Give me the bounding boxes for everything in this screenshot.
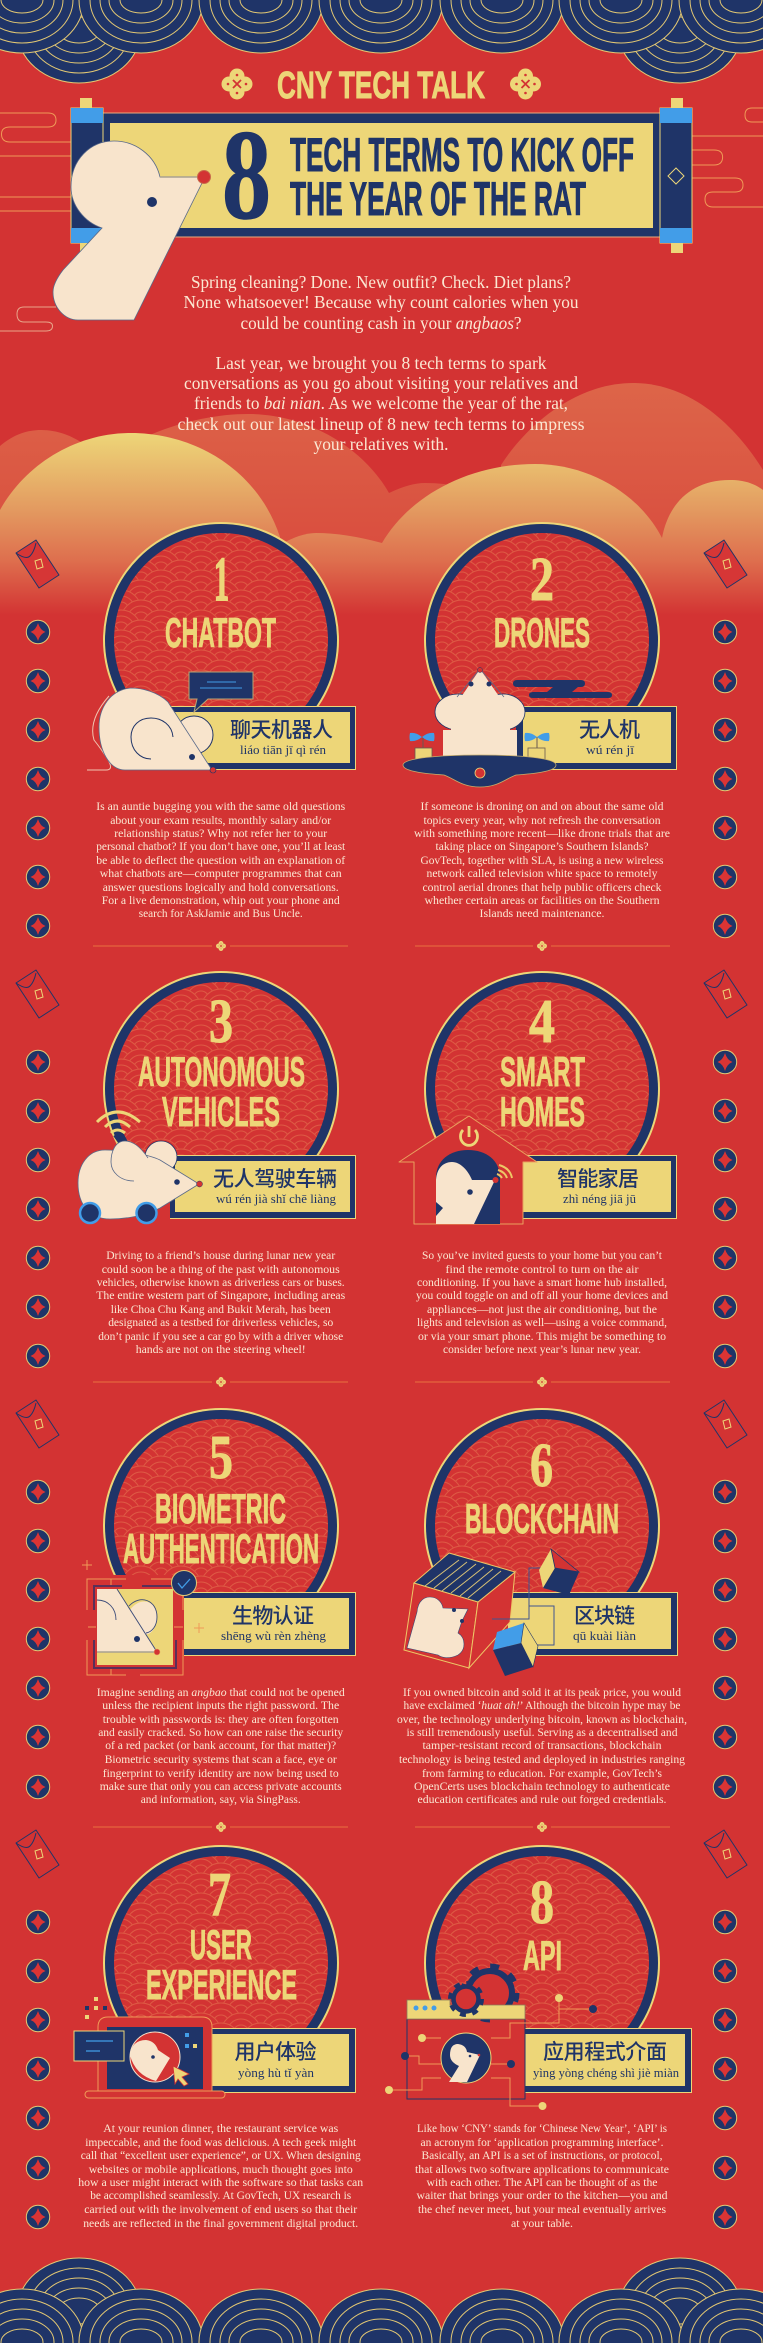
body text: Like how ‘CNY’ stands for ‘Chinese New Year’, ‘API’ is [417, 2121, 667, 2135]
banner: 聊天机器人 [230, 719, 333, 742]
large gear [463, 1966, 517, 2020]
number: 6 [530, 1432, 553, 1500]
panel 1: chatbot: 1 [214, 546, 229, 614]
kicker text: CNY TECH TALK [277, 65, 485, 107]
intro text: conversations as you go about visiting your relatives and [184, 373, 578, 393]
medallion [103, 971, 339, 1207]
body text [96, 799, 346, 920]
scroll knobs [80, 98, 683, 253]
panel 1: chatbot [87, 522, 356, 920]
banner: liáo tiān jī qì rén [240, 742, 327, 757]
body text: If you owned bitcoin and sold it at its peak price, you would [403, 1685, 681, 1699]
body text: taking place on Singapore’s Southern Islands? [436, 839, 648, 853]
back clouds [0, 383, 763, 560]
body text: tamper-resistant record of transactions, blockchain [422, 1738, 662, 1752]
banner: qū kuài liàn [573, 1628, 636, 1643]
banner: wú rén jià shǐ chē liàng [216, 1191, 336, 1206]
body text: call that “excellent user experience”, or UX. When designing [81, 2148, 361, 2162]
illustration: biometric phone [82, 1560, 204, 1679]
body text [397, 1685, 687, 1806]
body text: OpenCerts uses blockchain technology to authenticate [414, 1779, 670, 1793]
body text: at your table. [511, 2216, 573, 2230]
medallion [424, 1408, 660, 1644]
banner: yòng hù tǐ yàn [238, 2065, 315, 2080]
panel 2: drones [403, 522, 677, 920]
illustration: header rat [53, 141, 210, 320]
body text: consider before next year’s lunar new year. [443, 1342, 641, 1356]
body text [414, 799, 670, 920]
body text [96, 1248, 346, 1356]
body text: For a live demonstration, whip out your phone and [102, 893, 340, 907]
body text: impeccable, and the food was delicious. A tech geek might [85, 2135, 357, 2149]
body text: what chatbots are—computer programmes that can [100, 866, 342, 880]
body text: carried out with the involvement of end users so that their [84, 2202, 357, 2216]
heading [500, 1048, 585, 1135]
body text: about your exam results, monthly salary and/or [110, 813, 331, 827]
body text: or via your smart phone. This might be something to [418, 1329, 666, 1343]
cursor [173, 2066, 189, 2086]
body text: Driving to a friend’s house during lunar new year [106, 1248, 335, 1262]
body text: find the remote control to turn on the air [446, 1262, 638, 1276]
heading: CHATBOT [165, 609, 276, 656]
navy shadow [94, 1586, 176, 1668]
banner: 智能家居 [557, 1168, 639, 1191]
body text: technology is being tested and deployed in industries ranging [399, 1752, 685, 1766]
pixel dots [85, 1997, 197, 2048]
banner: 无人机 [579, 719, 640, 742]
illustration: smart home [399, 1116, 537, 1224]
body text: control aerial drones that help public officers check [422, 880, 662, 894]
panel 3: autonomous vehicles [78, 971, 356, 1356]
illustration: API window and gears [385, 1966, 597, 2110]
banner: 无人驾驶车辆 [213, 1168, 337, 1191]
body text: over, the technology underlying bitcoin, known as blockchain, [397, 1712, 687, 1726]
heading: BLOCKCHAIN [465, 1495, 619, 1542]
body text [97, 1685, 345, 1806]
medallion [103, 1408, 339, 1644]
intro text: Spring cleaning? Done. New outfit? Check. Diet plans? [191, 272, 571, 292]
number: 5 [209, 1424, 233, 1492]
banner: wú rén jī [586, 742, 634, 757]
panel 4: smart homes [399, 971, 677, 1356]
body text: of a red packet (or bank account, for that matter)? [105, 1738, 336, 1752]
banner [183, 1592, 356, 1656]
scroll banner [71, 98, 692, 253]
big numeral 8: 8 [222, 103, 271, 246]
body text: The entire western part of Singapore, including areas [96, 1288, 346, 1302]
body text: network called television white space to remotely [426, 866, 658, 880]
circuit lines [389, 1998, 593, 2106]
body text: vehicles, otherwise known as driverless cars or buses. [97, 1275, 345, 1289]
banner: yìng yòng chéng shì jiè miàn [533, 2065, 679, 2080]
body text: like Choa Chu Kang and Bukit Merah, has been [111, 1302, 331, 1316]
body text [78, 2121, 363, 2230]
body text [416, 1248, 668, 1356]
illustration: rat with speech bubble [87, 672, 253, 773]
number: 8 [530, 1869, 554, 1937]
body text: personal chatbot? If you don’t have one, you’ll at least [96, 839, 346, 853]
rat on cube [407, 1597, 468, 1658]
wifi arcs [497, 1165, 512, 1178]
medallion [103, 522, 339, 758]
body text: whether certain areas or facilities on the Southern [424, 893, 660, 907]
door with rat [436, 1150, 500, 1224]
kicker: CNY Tech Talk [222, 65, 541, 107]
banner: 用户体验 [234, 2041, 316, 2064]
decorative cloud lines [0, 108, 763, 331]
body text: make sure that only you can access private accounts [100, 1779, 342, 1793]
clouds [0, 383, 763, 620]
body text: Is an auntie bugging you with the same old questions [96, 799, 346, 813]
body text: Biometric security systems that scan a face, eye or [105, 1752, 337, 1766]
banner [170, 1155, 356, 1219]
body text: hands are not on the steering wheel! [136, 1342, 306, 1356]
body text: fingerprint to verify identity are now being used to [103, 1766, 339, 1780]
banner [205, 2028, 356, 2093]
body text: the chef never meet, but your meal eventually arrives [418, 2202, 666, 2216]
body text: from farming to education. For example, GovTech’s [422, 1766, 662, 1780]
banner: zhì néng jiā jū [563, 1191, 636, 1206]
banner: shēng wù rèn zhèng [221, 1628, 327, 1643]
body text: and information, say, via SingPass. [141, 1792, 301, 1806]
panel 5: biometric authentication [82, 1408, 356, 1806]
panel 6: blockchain [397, 1408, 687, 1806]
body text: with something more recent—like drone trials that are [414, 826, 670, 840]
illustration: drone rat [403, 668, 612, 787]
front clouds [0, 433, 763, 620]
body text: Imagine sending an angbao that could not be opened [97, 1685, 345, 1699]
illustration: laptop with rat [74, 1997, 225, 2098]
banner [520, 2028, 692, 2093]
heading: AUTONOMOUS [138, 1048, 305, 1095]
dividers row 1 [93, 941, 670, 951]
right roller [660, 108, 692, 243]
body text: topics every year, why not refresh the conversation [424, 813, 660, 827]
banner [516, 706, 677, 770]
body text: websites or mobile applications, much thought goes into [89, 2162, 353, 2176]
body text: waiter that brings your order to the kitchen—you and [416, 2188, 668, 2202]
body text: GovTech, together with SLA, is using a new wireless [420, 853, 664, 867]
intro text: Last year, we brought you 8 tech terms to spark [216, 353, 546, 373]
body text: relationship status? Why not refer her to your [114, 826, 327, 840]
body text: conditioning. If you have a smart home hub installed, [417, 1275, 667, 1289]
banner: 区块链 [574, 1605, 635, 1628]
heading: HOMES [500, 1088, 585, 1135]
heading: AUTHENTICATION [123, 1525, 319, 1572]
panel 8: API [385, 1845, 692, 2230]
number: 3 [209, 988, 233, 1056]
number: 2 [530, 546, 554, 614]
left roller [71, 108, 103, 243]
body text: appliances—not just the air conditioning, but the [427, 1302, 657, 1316]
body text: how a user might interact with the software so that tasks can [78, 2175, 363, 2189]
red packets [16, 540, 747, 1878]
medallion [424, 522, 660, 758]
plus marks [82, 1560, 204, 1633]
side ornaments: right [713, 620, 737, 2229]
heading: API [523, 1932, 562, 1979]
intro text: friends to bai nian. As we welcome the year of the rat, [194, 393, 568, 413]
body text: trouble with passwords is: they are often forgotten [103, 1712, 339, 1726]
number: 4 [529, 988, 555, 1056]
heading [138, 1048, 305, 1135]
body text: is still tremendously useful. Serving as a decentralised and [406, 1725, 678, 1739]
bottom scallop border [0, 2258, 763, 2343]
intro text [178, 272, 584, 454]
body text: If someone is droning on and on about the same old [420, 799, 664, 813]
medallion [424, 1845, 660, 2081]
body text: education certificates and rule out forged credentials. [418, 1792, 666, 1806]
small gear [450, 1983, 482, 2015]
icon: flower left [222, 68, 252, 100]
heading: VEHICLES [162, 1088, 280, 1135]
scroll centre band [103, 113, 660, 237]
body text: be able to deflect the question with an explanation of [96, 853, 345, 867]
body text: lights and television as well—using a voice command, [417, 1315, 667, 1329]
illustration: rat car [78, 1112, 202, 1223]
body text: with each other. The API can be thought of as the [426, 2175, 658, 2189]
connector lines [492, 1568, 554, 1645]
body text: designated as a testbed for driverless vehicles, so [108, 1315, 333, 1329]
heading: BIOMETRIC [155, 1485, 286, 1532]
oval portrait with rat [441, 2033, 491, 2083]
heading: USER [190, 1921, 252, 1968]
side ornaments: left [26, 620, 50, 2229]
heading: SMART [500, 1048, 585, 1095]
body text: you could toggle on and off all your home devices and [416, 1288, 668, 1302]
banner [508, 1592, 678, 1656]
top scallop border [0, 0, 763, 83]
icon: power [460, 1126, 478, 1145]
circuit nodes [385, 1994, 597, 2110]
heading [146, 1921, 297, 2008]
body text: search for AskJamie and Bus Uncle. [139, 906, 303, 920]
intro text: could be counting cash in your angbaos? [240, 313, 522, 333]
small cube [539, 1549, 579, 1595]
banner: 生物认证 [232, 1605, 314, 1628]
big cube [404, 1583, 478, 1668]
medallion [424, 971, 660, 1207]
body text: an acronym for ‘application programming interface’. [420, 2135, 664, 2149]
check badge [172, 1570, 196, 1596]
intro text: check out our latest lineup of 8 new tech terms to impress [178, 414, 584, 434]
body text: unless the recipient inputs the right password. The [102, 1698, 339, 1712]
body text: At your reunion dinner, the restaurant service was [103, 2121, 339, 2135]
body text: and easily cracked. So how can one raise the security [98, 1725, 343, 1739]
body text: needs are reflected in the final government digital product. [83, 2216, 358, 2230]
intro text: None whatsoever! Because why count calories when you [184, 292, 578, 312]
blue cube [493, 1623, 538, 1676]
body text: Islands need maintenance. [480, 906, 604, 920]
body text: don’t panic if you see a car go by with a driver whose [98, 1329, 343, 1343]
banner: 应用程式介面 [543, 2041, 667, 2064]
body text: be accomplished seamlessly. At GovTech, UX research is [90, 2188, 352, 2202]
body text: answer questions logically and hold conversations. [103, 880, 339, 894]
illustration: block cubes [404, 1549, 579, 1676]
heading [123, 1485, 319, 1572]
dividers row 2 [93, 1377, 670, 1387]
banner [165, 706, 356, 770]
body text: that allows two software applications to communicate [415, 2162, 669, 2176]
panel 7: user experience [74, 1845, 363, 2230]
icon: flower right [510, 68, 541, 100]
body text: could soon be a thing of the past with autonomous [102, 1262, 340, 1276]
body text: have exclaimed ‘huat ah!’ Although the bitcoin hype may be [404, 1698, 680, 1712]
body text: Basically, an API is a set of instructions, or protocol, [422, 2148, 662, 2162]
heading: DRONES [494, 609, 590, 656]
window header [407, 2000, 525, 2019]
medallion [103, 1845, 339, 2081]
body text: So you’ve invited guests to your home but you can’t [422, 1248, 663, 1262]
scan frame [87, 1579, 183, 1675]
banner [523, 1155, 677, 1219]
heading: EXPERIENCE [146, 1961, 297, 2008]
dividers row 3 [93, 1822, 670, 1832]
number: 7 [208, 1861, 231, 1929]
intro text: your relatives with. [314, 434, 448, 454]
body text [415, 2121, 669, 2230]
